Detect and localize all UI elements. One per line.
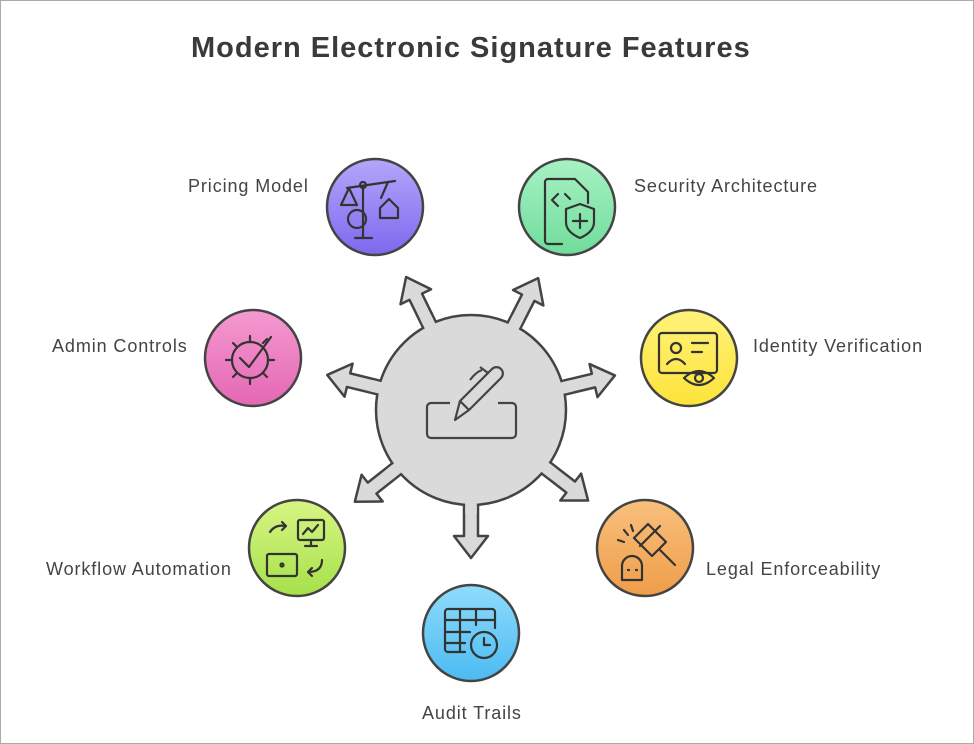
icon: secure doc: [545, 179, 594, 244]
text: Legal Enforceability: [706, 559, 881, 579]
icon: workflow: [267, 520, 324, 576]
labels: Pricing Model: [188, 176, 309, 196]
text: Audit Trails: [422, 703, 522, 723]
icon: gear check: [226, 336, 274, 384]
text: Admin Controls: [52, 336, 188, 356]
text: Workflow Automation: [46, 559, 232, 579]
text: Identity Verification: [753, 336, 923, 356]
title: Modern Electronic Signature Features: [191, 32, 751, 64]
icon: gavel: [618, 524, 675, 580]
icon: ID: [659, 333, 717, 385]
icon circles: [205, 159, 737, 681]
icon: table clock: [445, 609, 497, 658]
text: Security Architecture: [634, 176, 818, 196]
center hub: [323, 270, 619, 558]
icon: scale: [341, 181, 398, 238]
